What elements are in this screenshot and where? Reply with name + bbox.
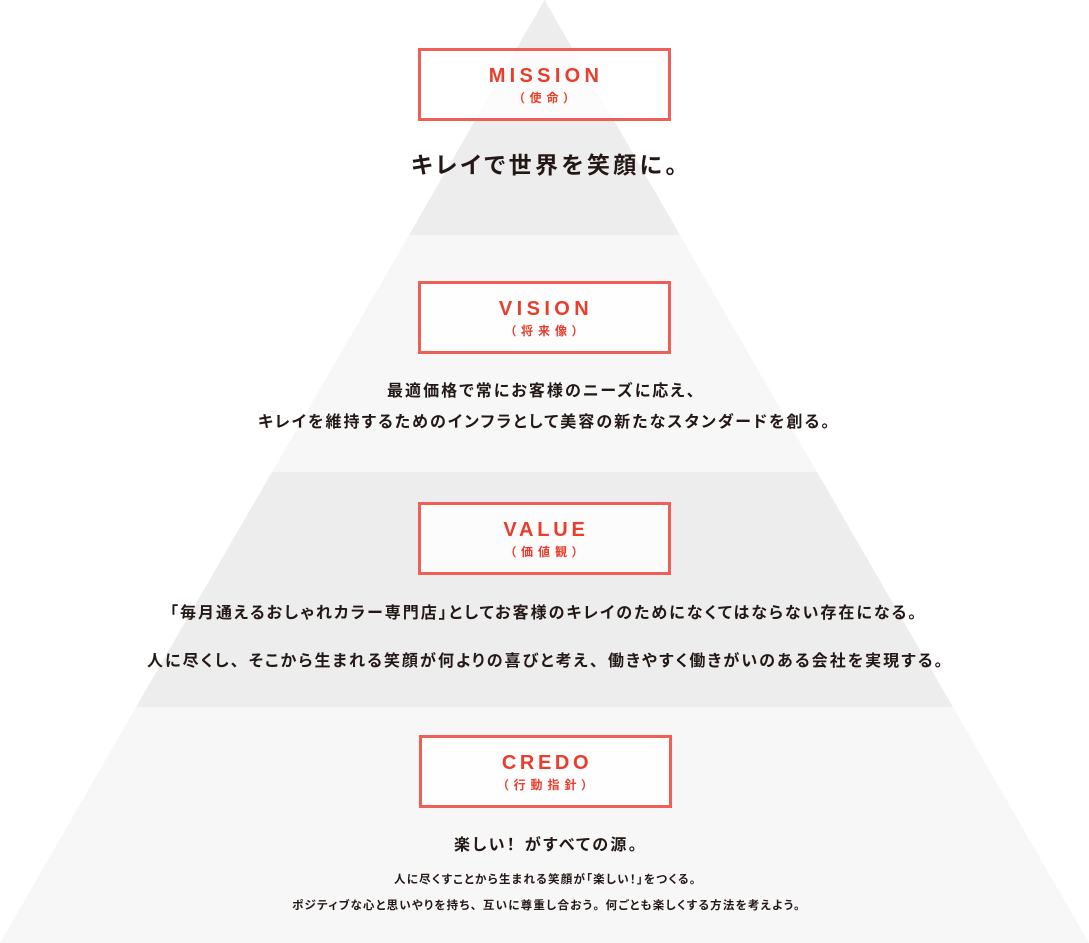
label box: mission — [418, 48, 671, 121]
pyramid tier: value — [136, 472, 953, 707]
mission statement: キレイで世界を笑顔に。 — [411, 152, 680, 178]
label box: value: （価値観） — [510, 545, 583, 559]
pyramid tier: mission — [409, 0, 680, 235]
label box: credo: CREDO — [502, 752, 592, 774]
vision statement line 2: キレイを維持するためのインフラとして美容の新たなスタンダードを創る。 — [258, 414, 831, 431]
label box: vision — [418, 281, 671, 354]
label box: vision: （将来像） — [510, 324, 583, 338]
value statement 2: 人に尽くし、そこから生まれる笑顔が何よりの喜びと考え、働きやすく働きがいのある会社を実現する。 — [147, 653, 945, 670]
label box: mission: （使命） — [518, 91, 574, 105]
pyramid tier: vision — [272, 235, 817, 472]
pyramid tier: credo — [0, 707, 1089, 943]
credo statement 1: 人に尽くすことから生まれる笑顔が「楽しい！」をつくる。 — [394, 874, 697, 886]
vision statement line 1: 最適価格で常にお客様のニーズに応え、 — [387, 383, 697, 400]
label box: mission: MISSION — [489, 65, 603, 87]
label box: credo: （行動指針） — [502, 778, 592, 792]
value statement 1: 「毎月通えるおしゃれカラー専門店」としてお客様のキレイのためになくてはならない存在になる。 — [170, 605, 918, 622]
label box: value: VALUE — [503, 519, 589, 541]
credo statement 2: ポジティブな心と思いやりを持ち、互いに尊重し合おう。何ごとも楽しくする方法を考えよう。 — [292, 900, 801, 912]
label box: vision: VISION — [499, 298, 593, 320]
label box: credo — [419, 735, 672, 808]
label box: value — [418, 502, 671, 575]
credo heading: 楽しい！ がすべての源。 — [454, 837, 639, 854]
